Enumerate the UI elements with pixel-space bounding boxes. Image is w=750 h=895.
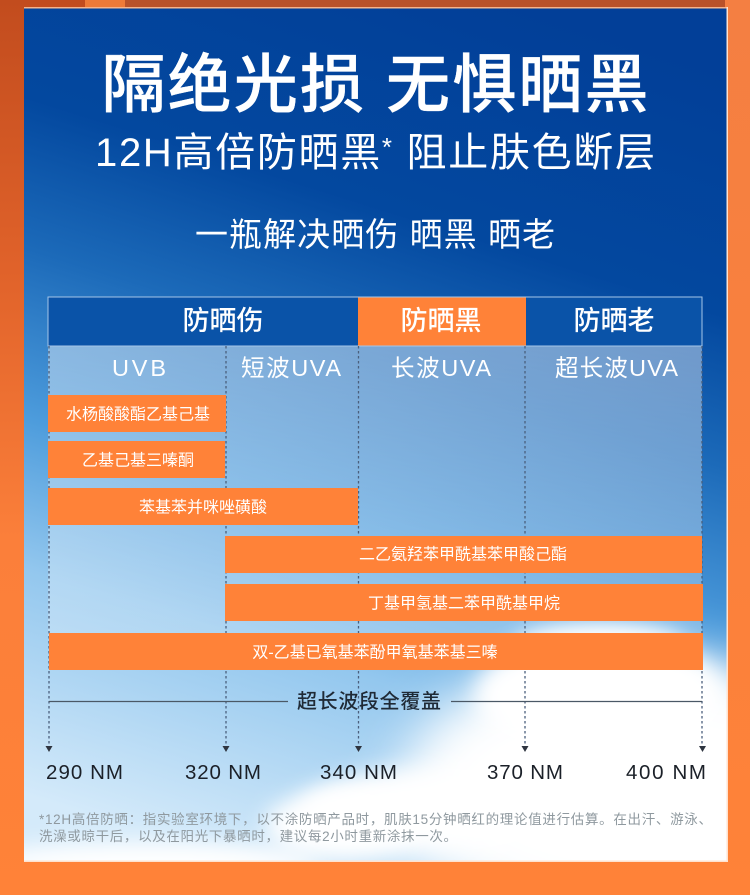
table header: 防晒黑	[400, 306, 482, 336]
coverage line and label: 超长波段全覆盖	[297, 690, 441, 713]
ingredient bars: 二乙氨羟苯甲酰基苯甲酸己酯	[359, 546, 567, 564]
ingredient bars: 双-乙基已氧基苯酚甲氧基苯基三嗪	[252, 644, 498, 662]
ingredient bars: 水杨酸酸酯乙基己基	[66, 406, 210, 424]
tagline: 一瓶解决晒伤 晒黑 晒老	[195, 216, 555, 253]
table body veil	[48, 346, 702, 636]
wavelength labels: 370 NM	[487, 761, 563, 784]
band dividers	[49, 346, 702, 746]
subtitle: 12H高倍防晒黑	[95, 131, 380, 175]
footnote	[39, 811, 712, 844]
ingredient bars: 乙基己基三嗪酮	[82, 452, 194, 470]
ingredient bars: 苯基苯并咪唑磺酸	[139, 498, 267, 516]
band labels: 短波UVA	[241, 355, 341, 381]
footnote: 洗澡或晾干后，以及在阳光下暴晒时，建议每2小时重新涂抹一次。	[39, 829, 457, 844]
wavelength labels: 400 NM	[626, 761, 706, 784]
wavelength labels: 290 NM	[46, 761, 123, 784]
wavelength labels	[46, 761, 706, 784]
wavelength labels: 320 NM	[185, 761, 261, 784]
band labels: 超长波UVA	[555, 355, 678, 381]
subtitle: 阻止肤色断层	[394, 131, 655, 175]
wavelength labels: 340 NM	[320, 761, 397, 784]
ingredient bars: 丁基甲氢基二苯甲酰基甲烷	[368, 594, 560, 612]
chart: UV wavelength coverage table	[46, 297, 706, 784]
band labels: 长波UVA	[391, 355, 491, 381]
table header	[48, 297, 702, 346]
band labels	[112, 355, 678, 381]
table header: 防晒伤	[182, 306, 264, 336]
ingredient bars	[48, 395, 703, 670]
footnote: *12H高倍防晒：指实验室环境下，以不涂防晒产品时，肌肤15分钟晒红的理论值进行估算。在出汗、游泳、	[39, 811, 712, 827]
title: 隔绝光损 无惧晒黑	[102, 49, 648, 121]
band labels: UVB	[112, 355, 166, 381]
table header: 防晒老	[574, 306, 654, 336]
subtitle: *	[382, 132, 392, 162]
axis arrowheads	[46, 746, 706, 752]
